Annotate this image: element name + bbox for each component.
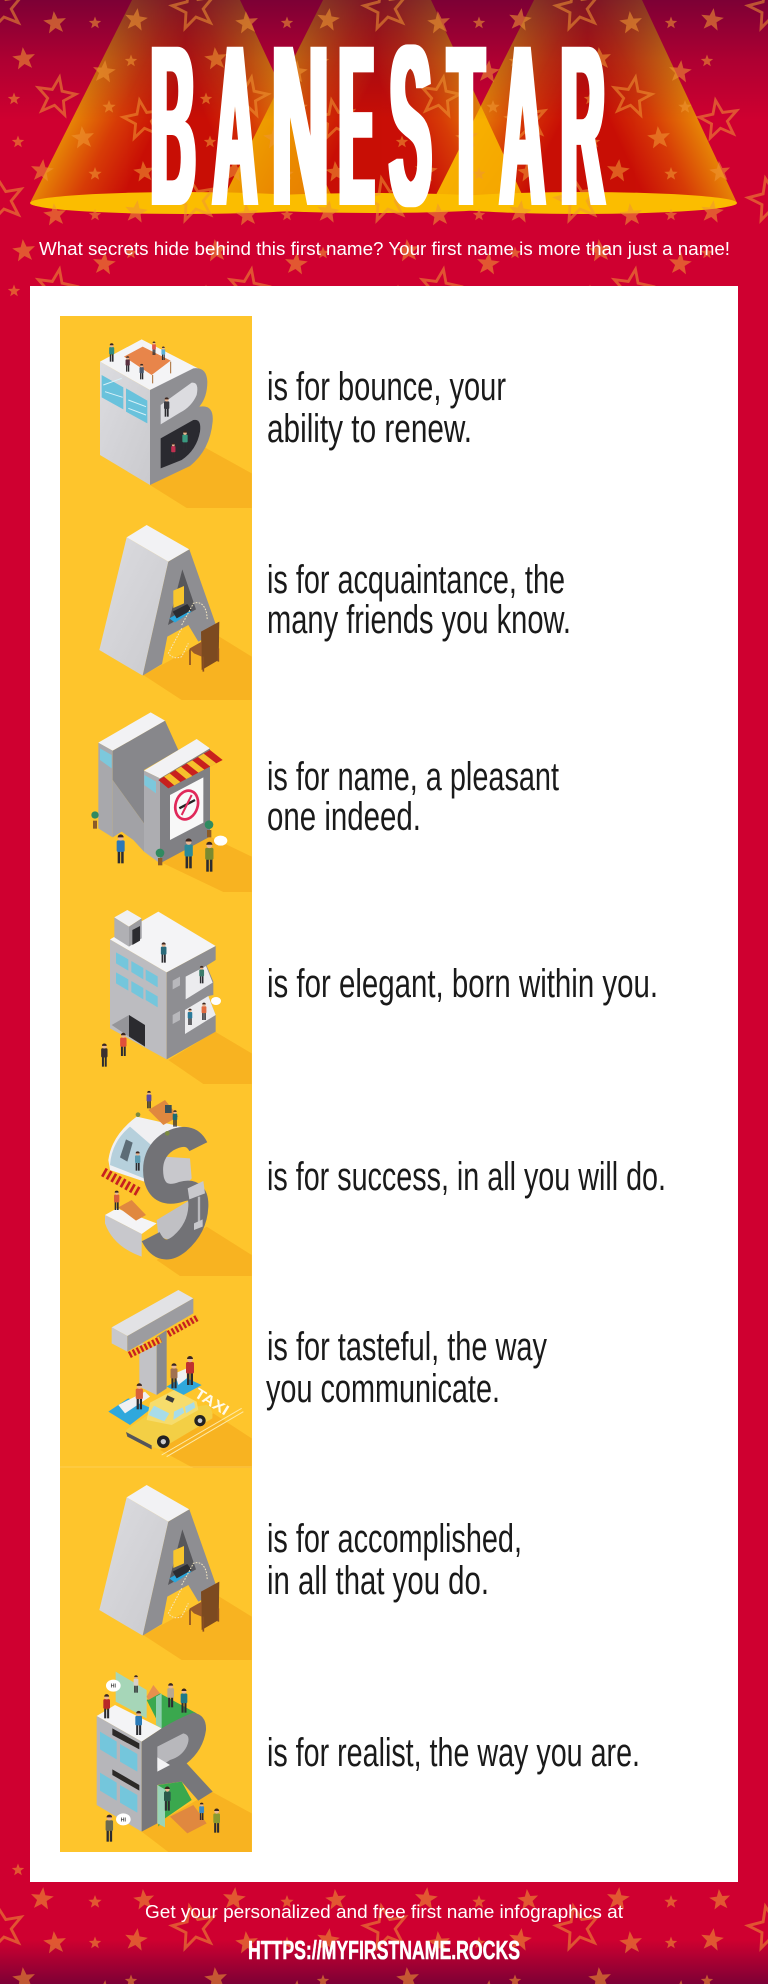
left stem side — [98, 743, 113, 837]
text: B: ability to renew. — [267, 407, 472, 451]
text: T — [266, 1325, 547, 1411]
desk — [118, 1200, 146, 1221]
footer url: HTTPS://MYFIRSTNAME.ROCKS — [248, 1935, 520, 1965]
text: second A: in all that you do. — [267, 1559, 489, 1603]
side face — [110, 939, 167, 1059]
seam line — [60, 1466, 252, 1468]
text: A: many friends you know. — [267, 598, 571, 642]
shadow — [150, 447, 252, 508]
speech bubble — [211, 997, 221, 1005]
people — [103, 1675, 220, 1842]
people — [109, 341, 188, 458]
roof table — [124, 347, 171, 375]
wall vents — [173, 977, 180, 1024]
HI bubbles — [106, 1680, 131, 1825]
footer text: Get your personalized and free first name infographics at — [145, 1902, 623, 1922]
HI bubbles: HI — [121, 1817, 127, 1823]
desk — [170, 1805, 207, 1833]
shadow — [168, 1032, 252, 1084]
people — [117, 834, 213, 872]
windows — [100, 748, 156, 793]
text: A — [267, 558, 571, 642]
text: A: is for acquaintance, the — [267, 558, 565, 602]
subtitle: What secrets hide behind this first name? Your first name is more than just a name! — [39, 239, 730, 259]
benches — [118, 1368, 187, 1413]
side face — [100, 362, 150, 485]
shadow — [142, 1792, 252, 1852]
front face — [150, 368, 213, 485]
upper curved body — [108, 1117, 195, 1182]
awning — [158, 750, 223, 788]
awnings — [129, 1317, 198, 1355]
people — [136, 1356, 194, 1409]
shadow — [137, 837, 252, 892]
T bar — [112, 1290, 193, 1336]
text: B — [267, 365, 506, 451]
HI bubbles: HI — [111, 1684, 117, 1690]
illustration: letter T building with taxi — [60, 1290, 252, 1468]
windows — [102, 375, 147, 423]
text: N — [267, 755, 559, 839]
roof — [100, 339, 200, 390]
text: second A: is for accomplished, — [267, 1517, 522, 1561]
title: N — [272, 0, 329, 254]
no smoking sign — [170, 777, 203, 840]
glass panels — [116, 1672, 147, 1718]
rooftop box — [114, 910, 142, 947]
front N dark faces — [113, 721, 178, 823]
illustration: letter N building — [91, 712, 252, 892]
text: R — [561, 0, 605, 254]
taxi — [126, 1390, 212, 1449]
windows — [116, 952, 158, 1007]
text: T: is for tasteful, the way — [267, 1325, 547, 1369]
text: B: is for bounce, your — [267, 365, 506, 409]
illustration: letter A building — [99, 525, 252, 700]
shadow — [160, 1413, 252, 1468]
speech bubble — [214, 836, 227, 846]
climbing wall opening — [161, 420, 200, 468]
people and desks on roof — [114, 1091, 178, 1210]
illustration: letter R building — [97, 1672, 252, 1852]
blue mats — [108, 1377, 202, 1425]
plants — [91, 811, 213, 865]
illustration: letter S building — [103, 1091, 252, 1276]
lower deck — [105, 1208, 157, 1234]
text: N: is for name, a pleasant — [267, 755, 559, 799]
title: A — [213, 0, 257, 254]
text: second A — [267, 1517, 522, 1603]
bottom dark shading — [0, 1940, 768, 1984]
illustration: letter E building — [101, 910, 252, 1084]
white content panel — [30, 286, 738, 1882]
title: T — [448, 0, 484, 254]
inner faces — [157, 1157, 192, 1192]
TAXI road marking: TAXI — [191, 1386, 231, 1419]
front face — [167, 946, 216, 1059]
green roof — [147, 1693, 197, 1729]
entrance — [112, 1015, 145, 1047]
illustration: letter B building — [100, 339, 252, 508]
top dark shading — [0, 0, 768, 120]
title: E — [339, 0, 374, 254]
side face — [97, 1716, 142, 1832]
yellow illustration column — [60, 316, 252, 1852]
sign boards — [112, 1728, 139, 1791]
title: B — [151, 0, 196, 254]
road lines — [162, 1408, 243, 1457]
curved window — [110, 1127, 155, 1178]
illustration: second letter A building — [99, 1485, 252, 1660]
balcony openings — [186, 966, 213, 999]
spotlight cones — [30, 0, 737, 214]
upper opening — [161, 383, 197, 424]
R opening — [157, 1733, 189, 1768]
tops — [98, 712, 165, 751]
T stem — [139, 1343, 157, 1395]
windows — [100, 1732, 137, 1813]
text: N: one indeed. — [267, 795, 421, 839]
title — [151, 0, 605, 254]
roof — [97, 1705, 162, 1742]
text: T: you communicate. — [266, 1367, 500, 1411]
wall unit and pipe — [188, 1181, 205, 1230]
R front — [142, 1713, 213, 1832]
title: S — [390, 0, 432, 254]
awning — [103, 1172, 139, 1192]
title: A — [500, 0, 545, 254]
people — [101, 942, 206, 1067]
S front — [151, 1137, 198, 1249]
right stem — [144, 771, 160, 863]
lower green area — [158, 1782, 192, 1827]
roof — [110, 912, 216, 972]
shadow — [157, 1227, 252, 1276]
